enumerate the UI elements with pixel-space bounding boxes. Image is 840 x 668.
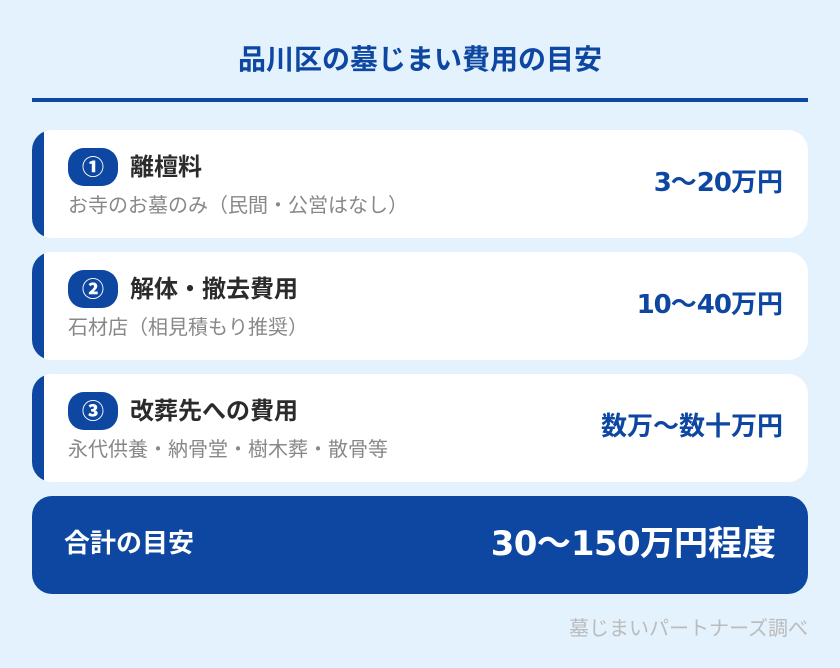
total label: 合計の目安	[64, 529, 194, 559]
badge 2: ②	[82, 272, 104, 304]
left accent bar 3	[32, 374, 44, 482]
panel: item 2	[32, 252, 808, 360]
panel: item 3	[32, 374, 808, 482]
item 3 description: 永代供養・納骨堂・樹木葬・散骨等	[68, 437, 388, 461]
item 2 description: 石材店（相見積もり推奨）	[68, 315, 308, 339]
item 3 name: 改葬先への費用	[130, 397, 298, 425]
badge 2	[68, 270, 118, 308]
panel: item 1	[32, 130, 808, 238]
left accent bar 1	[32, 130, 44, 238]
title rule	[32, 98, 808, 102]
item 1 amount: 3～20万円	[654, 168, 783, 198]
total amount: 30～150万円程度	[491, 524, 776, 564]
badge 3	[68, 392, 118, 430]
item 2 name: 解体・撤去費用	[130, 275, 298, 303]
panel: total	[32, 496, 808, 594]
item 2 amount: 10～40万円	[637, 290, 783, 320]
source note: 墓じまいパートナーズ調べ	[569, 616, 808, 640]
item 1 description: お寺のお墓のみ（民間・公営はなし）	[68, 193, 408, 217]
badge 1: ①	[82, 150, 104, 182]
item 1 name: 離檀料	[130, 153, 202, 181]
badge 3: ③	[82, 394, 104, 426]
item 3 amount: 数万～数十万円	[601, 412, 783, 442]
badge 1	[68, 148, 118, 186]
title: 品川区の墓じまい費用の目安	[238, 43, 602, 76]
left accent bar 2	[32, 252, 44, 360]
